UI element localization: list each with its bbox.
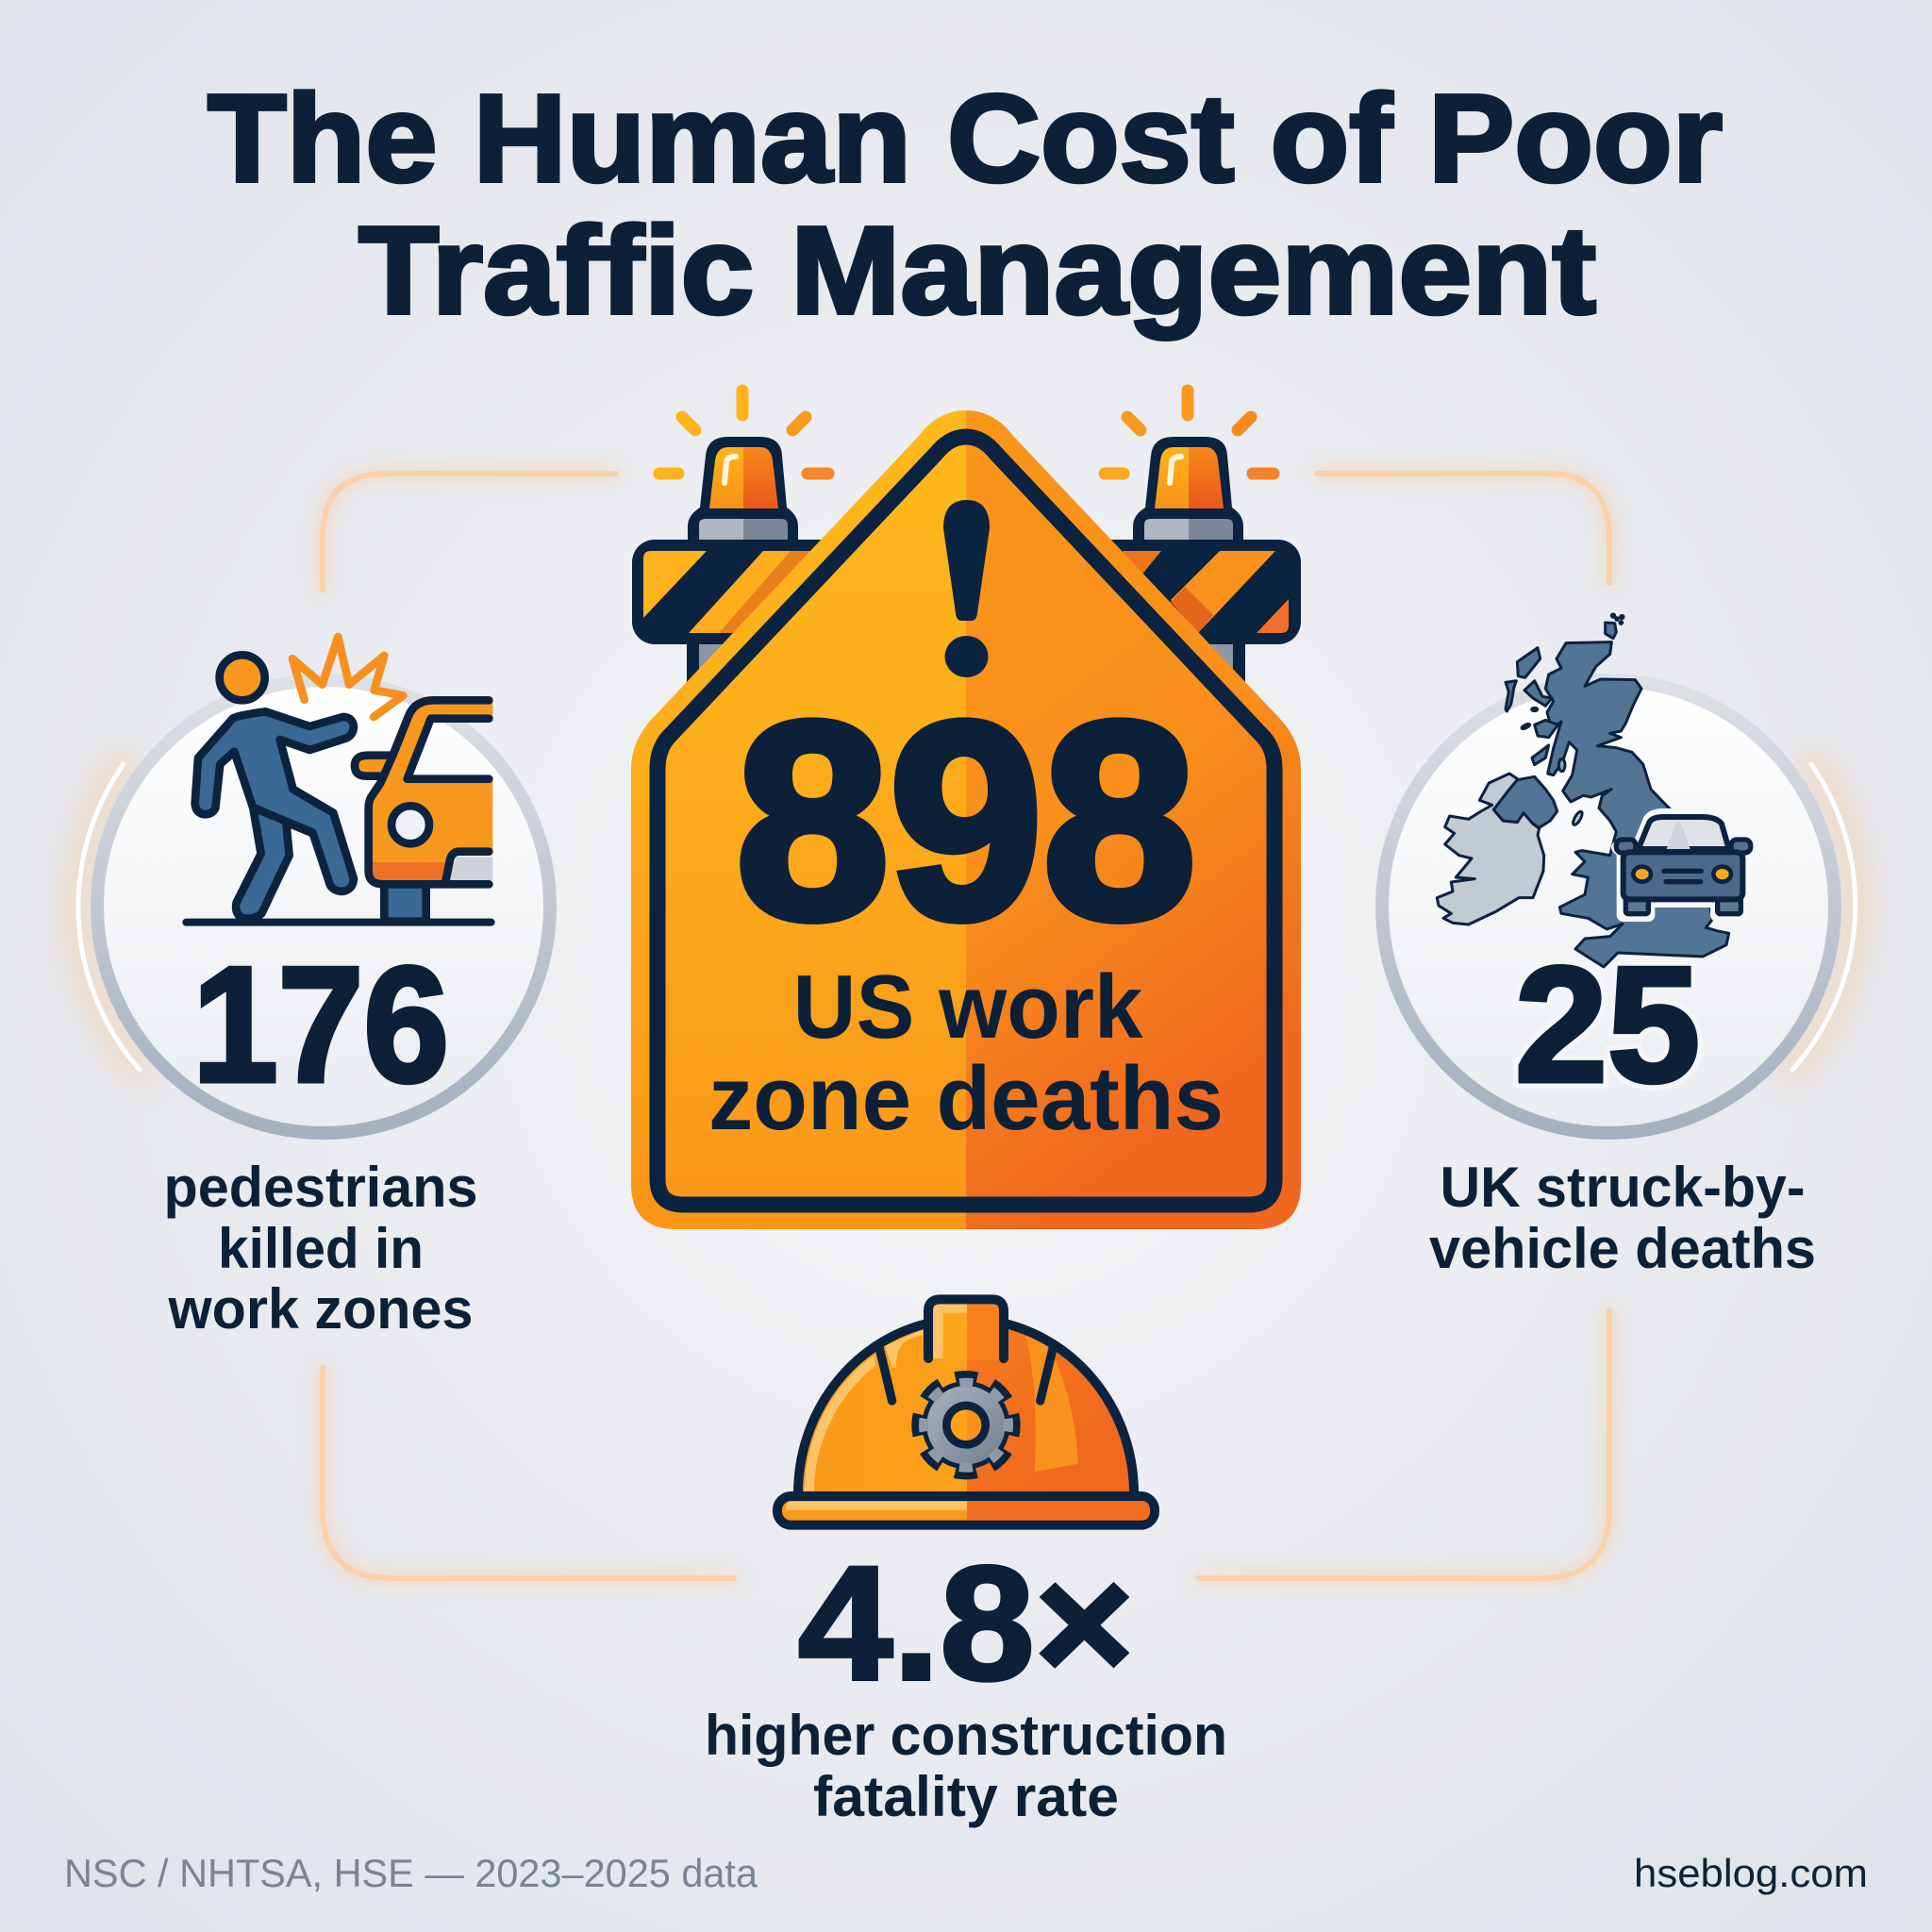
panel: construction fatality rate — [705, 1299, 1227, 1828]
label UK: vehicle deaths — [1429, 1217, 1816, 1280]
Great Britain — [1545, 642, 1729, 967]
label US work zone deaths: US work — [792, 957, 1143, 1058]
title: The Human Cost of Poor — [208, 69, 1723, 208]
glow arc left — [78, 764, 140, 1070]
icon: UK map with car — [1437, 614, 1751, 967]
left beacon — [659, 391, 828, 540]
label pedestrians: pedestrians — [164, 1156, 477, 1219]
label pedestrians: work zones — [168, 1277, 474, 1341]
panel: pedestrians stat — [78, 637, 550, 1341]
burst — [292, 637, 403, 717]
title — [208, 69, 1723, 340]
dome — [803, 1329, 967, 1491]
label construction: higher construction — [705, 1704, 1227, 1767]
body — [195, 711, 354, 919]
barrier and beacons — [632, 391, 1301, 708]
number 25: 25 — [1515, 932, 1700, 1116]
number 898: 898 — [736, 664, 1196, 976]
panel: central warning sign — [631, 391, 1301, 1229]
icon: pedestrian struck by car — [186, 637, 492, 923]
label US work zone deaths — [708, 957, 1224, 1149]
connector lines — [323, 474, 1609, 1578]
glow arc right — [1792, 764, 1856, 1070]
ground line — [186, 911, 491, 934]
circle right — [1382, 680, 1835, 1133]
source footer: NSC / NHTSA, HSE — 2023–2025 data — [64, 1851, 758, 1895]
label UK — [1429, 1156, 1816, 1280]
outlines — [798, 1299, 1134, 1493]
sign body — [631, 410, 1301, 1229]
ridge — [928, 1299, 1004, 1360]
panel: UK stat — [1382, 614, 1856, 1280]
label pedestrians: killed in — [218, 1217, 424, 1280]
Northern Ireland — [1493, 776, 1557, 827]
gear — [911, 1371, 1021, 1479]
label US work zone deaths: zone deaths — [708, 1048, 1224, 1149]
website credit: hseblog.com — [1634, 1851, 1868, 1895]
car badge — [1616, 815, 1751, 915]
exclamation mark — [943, 500, 990, 677]
label UK: UK struck-by- — [1440, 1156, 1806, 1219]
head — [220, 655, 265, 700]
car — [355, 700, 492, 922]
brim — [777, 1496, 1155, 1525]
label construction — [705, 1704, 1227, 1828]
dome highlights — [805, 1355, 875, 1493]
title: Traffic Management — [358, 201, 1596, 340]
islands — [1506, 614, 1624, 826]
barrier board — [632, 540, 1301, 644]
number 25 halo: 25 — [1515, 932, 1700, 1116]
number 176: 176 — [192, 932, 449, 1116]
number 4.8x: 4.8× — [798, 1533, 1134, 1714]
right beacon — [1105, 391, 1274, 540]
label pedestrians — [164, 1156, 477, 1341]
label construction: fatality rate — [813, 1765, 1119, 1828]
circle left — [97, 680, 550, 1133]
posts — [687, 641, 1245, 708]
icon: hard hat — [777, 1299, 1155, 1525]
Ireland — [1437, 774, 1544, 924]
